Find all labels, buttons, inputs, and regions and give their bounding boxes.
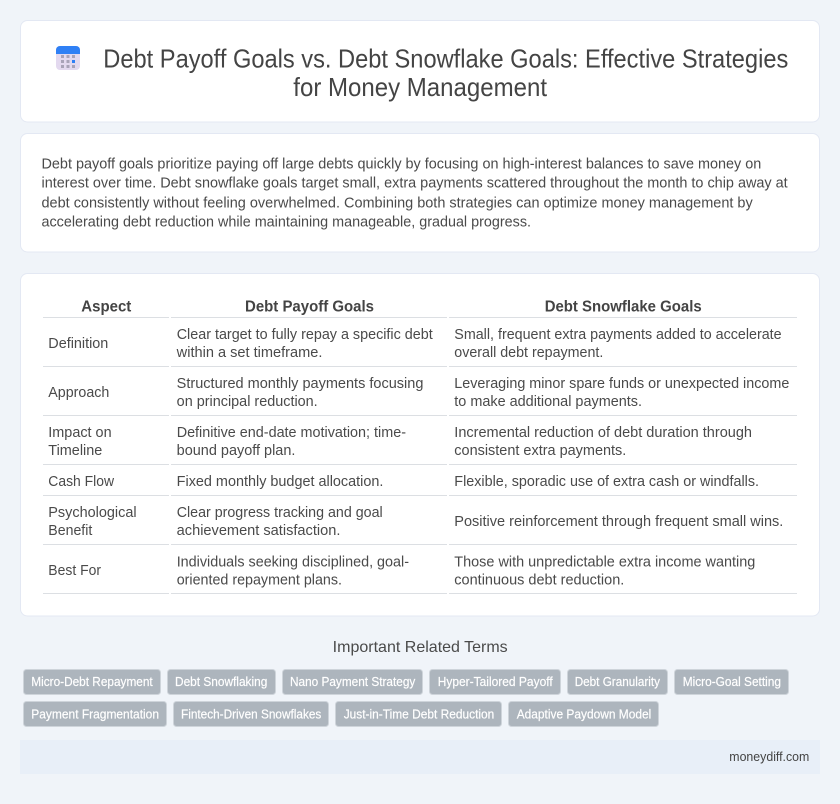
table row: approach	[43, 376, 797, 416]
table row: best for: oriented repayment plans.	[177, 573, 342, 589]
tag: fintech-driven snowflakes	[174, 702, 328, 726]
tag: nano payment strategy	[282, 670, 422, 694]
table row: psychological benefit	[43, 505, 797, 545]
tag: micro-debt repayment: Micro-Debt Repayment	[31, 674, 153, 689]
table row: definition	[43, 327, 797, 367]
table row: psychological benefit: achievement satisfaction.	[177, 523, 340, 539]
table row: best for	[43, 555, 797, 594]
title	[103, 45, 788, 102]
table row: psychological benefit: Benefit	[48, 523, 92, 539]
tag: micro-debt repayment	[24, 670, 160, 694]
table row: psychological benefit: Positive reinforcement through frequent small wins.	[454, 514, 783, 530]
icon: calendar	[56, 46, 80, 70]
related term tags	[24, 670, 788, 726]
tag: adaptive paydown model: Adaptive Paydown Model	[517, 706, 651, 721]
tag: debt granularity: Debt Granularity	[575, 674, 661, 689]
panel: comparison table	[20, 274, 820, 616]
table row: best for: Best For	[48, 563, 101, 579]
tag: debt snowflaking: Debt Snowflaking	[175, 674, 267, 689]
tag: debt snowflaking	[168, 670, 276, 694]
table row: impact on timeline: Timeline	[48, 443, 102, 459]
table row: cash flow: Cash Flow	[48, 474, 115, 490]
footer	[20, 740, 820, 774]
tag: just-in-time debt reduction: Just-in-Time Debt Reduction	[344, 706, 494, 721]
table row: cash flow	[43, 474, 797, 496]
table row: approach: to make additional payments.	[454, 394, 642, 410]
title: for Money Management	[293, 74, 547, 102]
tag: micro-goal setting: Micro-Goal Setting	[683, 674, 781, 689]
table header row: Debt Payoff Goals	[245, 299, 374, 316]
table row: best for: Those with unpredictable extra income wanting	[454, 555, 755, 571]
heading: important related terms: Important Related Terms	[333, 639, 508, 656]
table row: psychological benefit: Psychological	[48, 505, 137, 521]
table row: impact on timeline: Definitive end-date motivation; time-	[177, 425, 406, 441]
table row: definition: Small, frequent extra payments added to accelerate	[454, 327, 782, 343]
table row: cash flow: Fixed monthly budget allocation.	[177, 474, 383, 490]
text block: introduction paragraph: Debt payoff goals prioritize paying off large debts quickly by focusing on high-interest balances to save money on	[42, 155, 761, 172]
tag: just-in-time debt reduction	[336, 702, 502, 726]
table header row: Aspect	[81, 299, 132, 316]
table row: impact on timeline: bound payoff plan.	[177, 443, 295, 459]
table header row: Debt Snowflake Goals	[545, 299, 702, 316]
tag: micro-goal setting	[674, 670, 788, 694]
table row: approach: on principal reduction.	[177, 394, 318, 410]
table row: impact on timeline	[43, 425, 797, 465]
table row: approach: Leveraging minor spare funds or unexpected income	[454, 376, 789, 392]
title: Debt Payoff Goals vs. Debt Snowflake Goals: Effective Strategies	[103, 45, 788, 73]
tag: debt granularity	[568, 670, 668, 694]
table row: definition: overall debt repayment.	[454, 345, 603, 361]
tag: payment fragmentation: Payment Fragmentation	[31, 706, 159, 721]
text block: introduction paragraph	[42, 155, 788, 231]
table row: impact on timeline: Incremental reduction of debt duration through	[454, 425, 752, 441]
tag: adaptive paydown model	[508, 702, 658, 726]
table row: cash flow: Flexible, sporadic use of extra cash or windfalls.	[454, 474, 759, 490]
panel: header	[20, 20, 820, 122]
table row: definition: within a set timeframe.	[176, 345, 322, 361]
text block: introduction paragraph: debt consistently without feeling overwhelmed. Combining both strategies can optimize money management by	[42, 194, 753, 211]
table row: definition: Definition	[48, 336, 108, 352]
table row: psychological benefit: Clear progress tracking and goal	[177, 505, 383, 521]
tag: fintech-driven snowflakes: Fintech-Driven Snowflakes	[181, 706, 321, 721]
table row: impact on timeline: Impact on	[48, 425, 112, 441]
table row: approach: Structured monthly payments focusing	[177, 376, 423, 392]
table row: best for: continuous debt reduction.	[454, 573, 624, 589]
text block: introduction paragraph: interest over time. Debt snowflake goals target small, extra payments scattered throughout the month to chip away at	[42, 174, 788, 191]
panel: introduction	[20, 134, 820, 252]
tag: payment fragmentation	[24, 702, 166, 726]
table header row	[43, 299, 797, 318]
text block: introduction paragraph: accelerating debt reduction while maintaining manageable, gradual progress.	[42, 214, 531, 231]
table row: impact on timeline: consistent extra payments.	[454, 443, 626, 459]
tag: hyper-tailored payoff	[430, 670, 560, 694]
tag: hyper-tailored payoff: Hyper-Tailored Payoff	[438, 674, 553, 689]
table row: approach: Approach	[48, 385, 109, 401]
table row: definition: Clear target to fully repay a specific debt	[177, 327, 433, 343]
table row: best for: Individuals seeking disciplined, goal-	[177, 555, 409, 571]
footer: moneydiff.com	[729, 749, 809, 764]
tag: nano payment strategy: Nano Payment Strategy	[290, 674, 416, 689]
